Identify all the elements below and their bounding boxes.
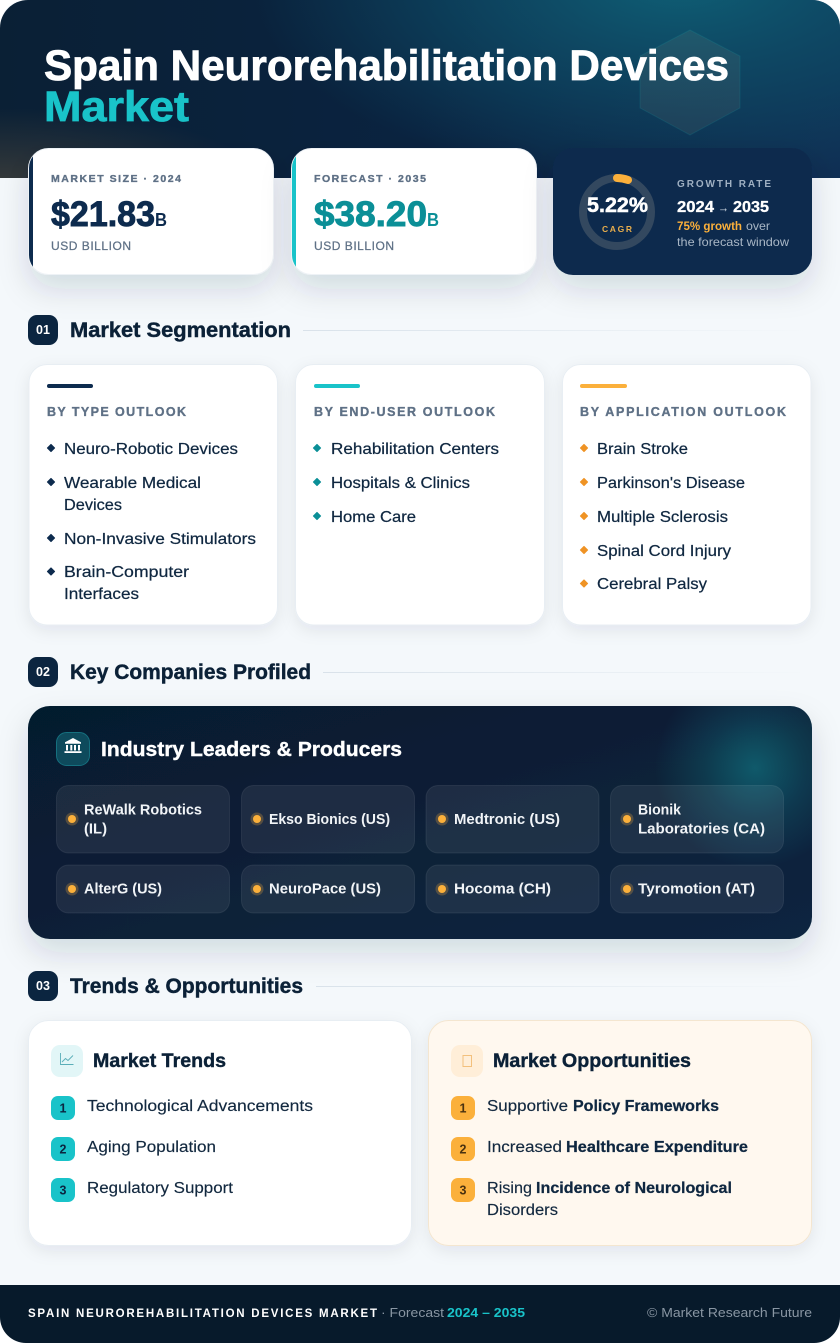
- stat card: growth rate: [553, 148, 812, 275]
- growth text: the forecast window: [677, 235, 789, 249]
- panel: market opportunities: [428, 1020, 812, 1246]
- footer: © Market Research Future: [647, 1306, 812, 1320]
- stat card: market size: MARKET SIZE · 2024: [51, 173, 181, 185]
- growth text: →: [718, 200, 729, 215]
- panel: by application outlook: BY APPLICATION OUTLOOK: [580, 405, 786, 419]
- panel: by type outlook: Neuro-Robotic Devices: [64, 441, 238, 458]
- panel: by application outlook: [562, 364, 811, 625]
- panel: market trends: Technological Advancements: [87, 1098, 313, 1115]
- panel: by application outlook: Brain Stroke: [597, 441, 688, 458]
- footer: · Forecast: [381, 1306, 445, 1320]
- growth text: GROWTH RATE: [677, 179, 771, 190]
- company chip: ReWalk: ReWalk Robotics: [84, 802, 202, 818]
- company chip: ReWalk: [56, 786, 230, 853]
- panel: market opportunities: 2: [460, 1142, 467, 1156]
- panel: by type outlook: Wearable Medical: [64, 475, 201, 492]
- panel: by end-user outlook: Rehabilitation Centers: [331, 441, 499, 458]
- company chip: NeuroPace: NeuroPace (US): [269, 882, 381, 898]
- panel: market opportunities: Supportive: [487, 1098, 568, 1115]
- company chip: Bionik: Bionik: [638, 802, 682, 818]
- panel: market trends: 2: [60, 1142, 67, 1156]
- panel: by type outlook: Interfaces: [64, 586, 139, 603]
- panel: by application outlook: Spinal Cord Injury: [597, 543, 731, 560]
- panel: by application outlook: Cerebral Palsy: [597, 576, 707, 593]
- panel: by end-user outlook: BY END-USER OUTLOOK: [314, 405, 495, 419]
- stat card: market size: [28, 148, 274, 274]
- title: Spain Neurorehabilitation Devices: [44, 42, 729, 90]
- company chip: Bionik: Laboratories (CA): [638, 822, 765, 838]
- panel: market opportunities: 1: [460, 1102, 467, 1116]
- stat card: forecast: [292, 148, 536, 274]
- panel: market trends: Regulatory Support: [87, 1180, 234, 1197]
- section heading 02: Key Companies Profiled: [70, 660, 311, 684]
- panel: market trends: [28, 1020, 412, 1246]
- panel: market opportunities: Healthcare Expenditure: [566, 1139, 748, 1156]
- stat card: market size: USD BILLION: [51, 239, 131, 253]
- panel: market opportunities: Incidence of Neurological: [536, 1180, 732, 1197]
- CAGR ring: CAGR: [602, 224, 632, 234]
- company chip: Tyromotion: Tyromotion (AT): [638, 882, 755, 898]
- company chip: NeuroPace: [242, 865, 414, 913]
- panel: by type outlook: Non-Invasive Stimulators: [64, 531, 256, 548]
- panel: market opportunities: Increased: [487, 1139, 562, 1156]
- company chip: Ekso: Ekso Bionics (US): [269, 812, 390, 828]
- stat card: forecast: B: [427, 210, 439, 230]
- company chip: Bionik: [610, 786, 784, 853]
- section heading 02: [28, 657, 812, 687]
- company chip: AlterG: [56, 865, 230, 913]
- section heading 02: 02: [36, 665, 50, 679]
- section heading 03: [28, 971, 812, 1001]
- panel: by type outlook: BY TYPE OUTLOOK: [47, 405, 186, 419]
- stat card: market size: B: [155, 210, 167, 230]
- company chip: Medtronic: [426, 786, 599, 853]
- stat card: market size: $21.83: [51, 195, 155, 234]
- section heading 03: 03: [36, 979, 50, 993]
- panel: by type outlook: Brain-Computer: [64, 564, 189, 581]
- CAGR ring: [583, 178, 651, 246]
- stat card: forecast: FORECAST · 2035: [314, 173, 426, 185]
- growth text: 2024: [677, 199, 714, 216]
- company chip: Hocoma: Hocoma (CH): [454, 882, 551, 898]
- company chip: Ekso: [242, 786, 414, 853]
- company chip: Medtronic: Medtronic (US): [454, 812, 560, 828]
- company chip: Hocoma: [426, 865, 599, 913]
- panel: by end-user outlook: Hospitals & Clinics: [331, 475, 470, 492]
- footer: 2024 – 2035: [447, 1306, 525, 1320]
- panel: market trends: Market Trends: [93, 1050, 226, 1072]
- title: [44, 42, 729, 131]
- panel: by end-user outlook: [296, 364, 544, 625]
- panel: industry leaders: [28, 706, 812, 939]
- stat card: forecast: USD BILLION: [314, 239, 394, 253]
- title: Market: [44, 83, 189, 131]
- hexagon decoration: [640, 30, 740, 135]
- section heading 01: 01: [36, 323, 50, 337]
- panel: by application outlook: Parkinson's Disease: [597, 475, 745, 492]
- icon: chart: [51, 1045, 83, 1077]
- panel: by type outlook: [29, 364, 278, 625]
- growth text: 2035: [733, 199, 769, 216]
- footer: SPAIN NEUROREHABILITATION DEVICES MARKET: [28, 1308, 377, 1320]
- panel: by end-user outlook: Home Care: [331, 509, 416, 526]
- icon: bank building: [56, 732, 90, 766]
- footer: [0, 1285, 840, 1343]
- panel: market trends: 1: [60, 1102, 67, 1116]
- section heading 03: Trends & Opportunities: [70, 974, 303, 998]
- panel: market opportunities: Rising: [487, 1180, 532, 1197]
- company chip: AlterG: AlterG (US): [84, 882, 162, 898]
- header banner: [0, 0, 840, 178]
- panel: by type outlook: Devices: [64, 497, 122, 514]
- panel: market opportunities: Market Opportunities: [493, 1050, 691, 1072]
- growth text: [677, 179, 789, 249]
- panel: market trends: Aging Population: [87, 1139, 216, 1156]
- panel: industry leaders: Industry Leaders & Producers: [101, 738, 402, 761]
- growth text: over: [746, 219, 770, 233]
- section heading 01: Market Segmentation: [70, 318, 291, 342]
- growth text: 75% growth: [677, 219, 742, 233]
- panel: by application outlook: Multiple Sclerosis: [597, 509, 728, 526]
- company chip: Tyromotion: [610, 865, 784, 913]
- panel: market opportunities: 3: [460, 1184, 467, 1198]
- company chip: ReWalk: (IL): [84, 822, 107, 838]
- CAGR ring: 5.22%: [587, 194, 648, 217]
- stat card: forecast: $38.20: [314, 195, 427, 234]
- section heading 01: [28, 315, 812, 345]
- panel: market opportunities: Policy Frameworks: [573, 1098, 719, 1115]
- panel: market trends: 3: [60, 1184, 67, 1198]
- icon: opportunity placeholder: [451, 1045, 483, 1077]
- panel: market opportunities: Disorders: [487, 1202, 558, 1219]
